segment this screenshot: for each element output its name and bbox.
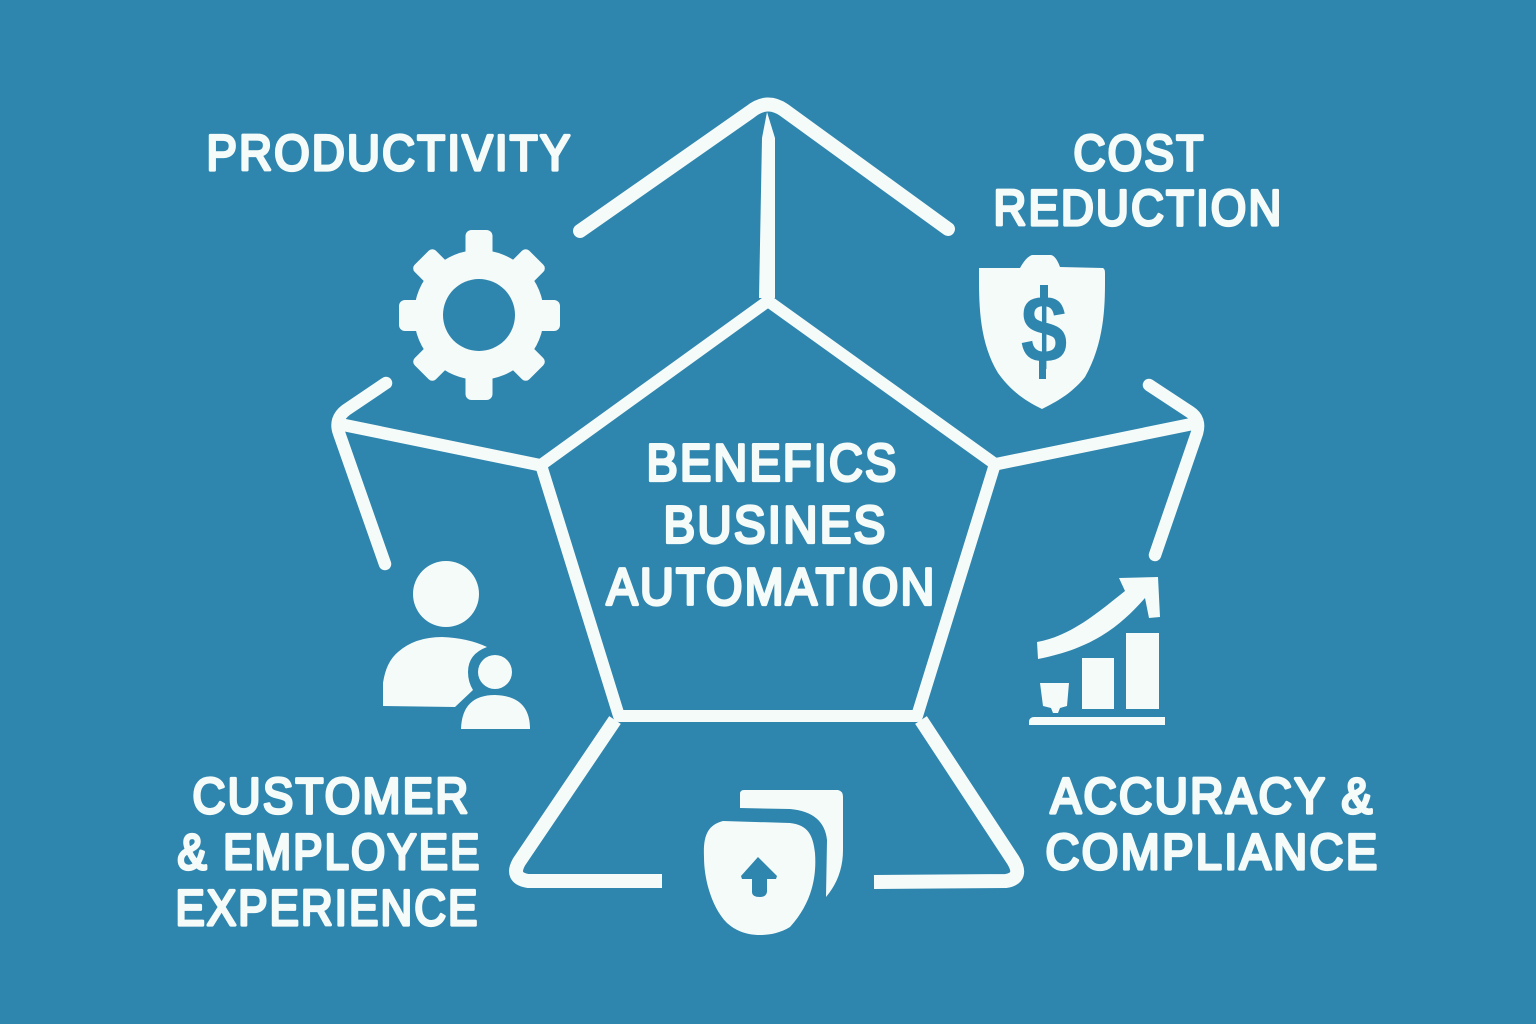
label: accuracy and compliance: ACCURACY & (1050, 768, 1374, 824)
label: customer and employee experience (176, 768, 482, 936)
icon: dollar shield: $ (1021, 276, 1067, 383)
diagram: pentagon frame and spokes (338, 104, 1198, 882)
upper right spoke (997, 424, 1192, 464)
label: customer and employee experience: & EMPLOYEE (178, 824, 482, 880)
label: cost reduction: REDUCTION (994, 180, 1284, 236)
label: accuracy and compliance (1046, 768, 1380, 880)
icon: dollar shield (979, 255, 1105, 409)
label: customer and employee experience: EXPERIENCE (176, 880, 480, 936)
top vertical spoke (759, 112, 775, 298)
label: accuracy and compliance: COMPLIANCE (1046, 824, 1380, 880)
upper left spoke (344, 425, 539, 465)
upper right bracket (1149, 385, 1198, 555)
heading: center title (606, 434, 936, 616)
lower left bracket (516, 720, 662, 881)
label: cost reduction (994, 125, 1284, 236)
central pentagon (541, 301, 995, 716)
heading: center title: AUTOMATION (606, 558, 936, 616)
heading: center title: BUSINES (664, 496, 888, 554)
upper left bracket (338, 383, 386, 564)
icon: people (383, 561, 530, 729)
label: productivity: PRODUCTIVITY (206, 125, 572, 181)
label: cost reduction: COST (1074, 125, 1206, 181)
icon: gear (399, 230, 560, 400)
icon: layered upload badge (704, 790, 843, 935)
heading: center title: BENEFICS (646, 434, 898, 492)
lower right bracket (874, 720, 1017, 882)
label: customer and employee experience: CUSTOMER (192, 768, 470, 824)
icon: growth chart (1029, 577, 1165, 725)
top spoke roof (580, 104, 948, 231)
